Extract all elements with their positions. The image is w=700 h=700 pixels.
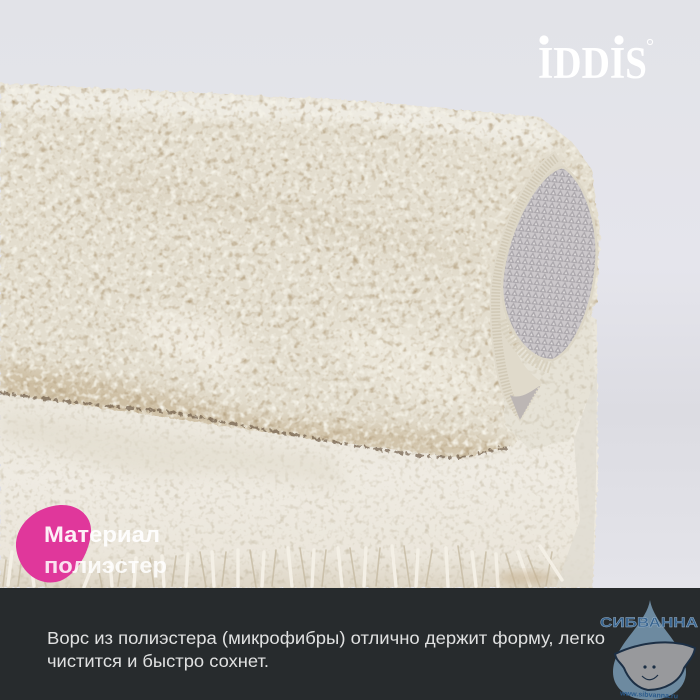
- badge title: Материал: [44, 522, 160, 547]
- watermark title: СИБВАННА: [600, 614, 698, 630]
- bathtub: [615, 642, 695, 690]
- pink blob: [16, 505, 91, 583]
- rug right side band: [556, 372, 597, 587]
- caption text: [47, 628, 605, 671]
- caption text: Ворс из полиэстера (микрофибры) отлично держит форму, легко: [47, 628, 605, 648]
- rim around the roll opening: [490, 151, 565, 422]
- hem curl under opening: [503, 320, 550, 368]
- badge: material: [16, 505, 167, 583]
- stitched hem: [496, 158, 556, 414]
- shaded rug patch under the roll: [0, 410, 350, 490]
- water drop: [613, 600, 686, 700]
- tub face: [642, 665, 658, 680]
- tan lower band: [0, 362, 510, 460]
- badge value: полиэстер: [44, 553, 167, 578]
- crease line under the roll: [0, 393, 510, 458]
- watermark: sibvanna logo: [600, 600, 698, 700]
- pale top band: [0, 83, 560, 150]
- mid tan band: [116, 180, 461, 258]
- logo dots: [539, 35, 624, 45]
- roll body: [0, 83, 600, 458]
- fuzzy end of the roll: [500, 312, 596, 450]
- caption text: чистится и быстро сохнет.: [47, 651, 269, 671]
- registered mark: [647, 39, 653, 45]
- long fringe: [3, 546, 562, 587]
- mid highlights: [142, 312, 243, 376]
- photo: rolled rug: [0, 83, 600, 460]
- dark caption bar: [0, 588, 700, 700]
- grey backing glimpse: [510, 385, 541, 420]
- photo: lower flat rug: [0, 312, 598, 588]
- tan tufts at lower right: [499, 571, 551, 585]
- mesh backing inside the roll: [502, 167, 597, 360]
- brand logo: IDDIS: IDDIS: [538, 38, 647, 88]
